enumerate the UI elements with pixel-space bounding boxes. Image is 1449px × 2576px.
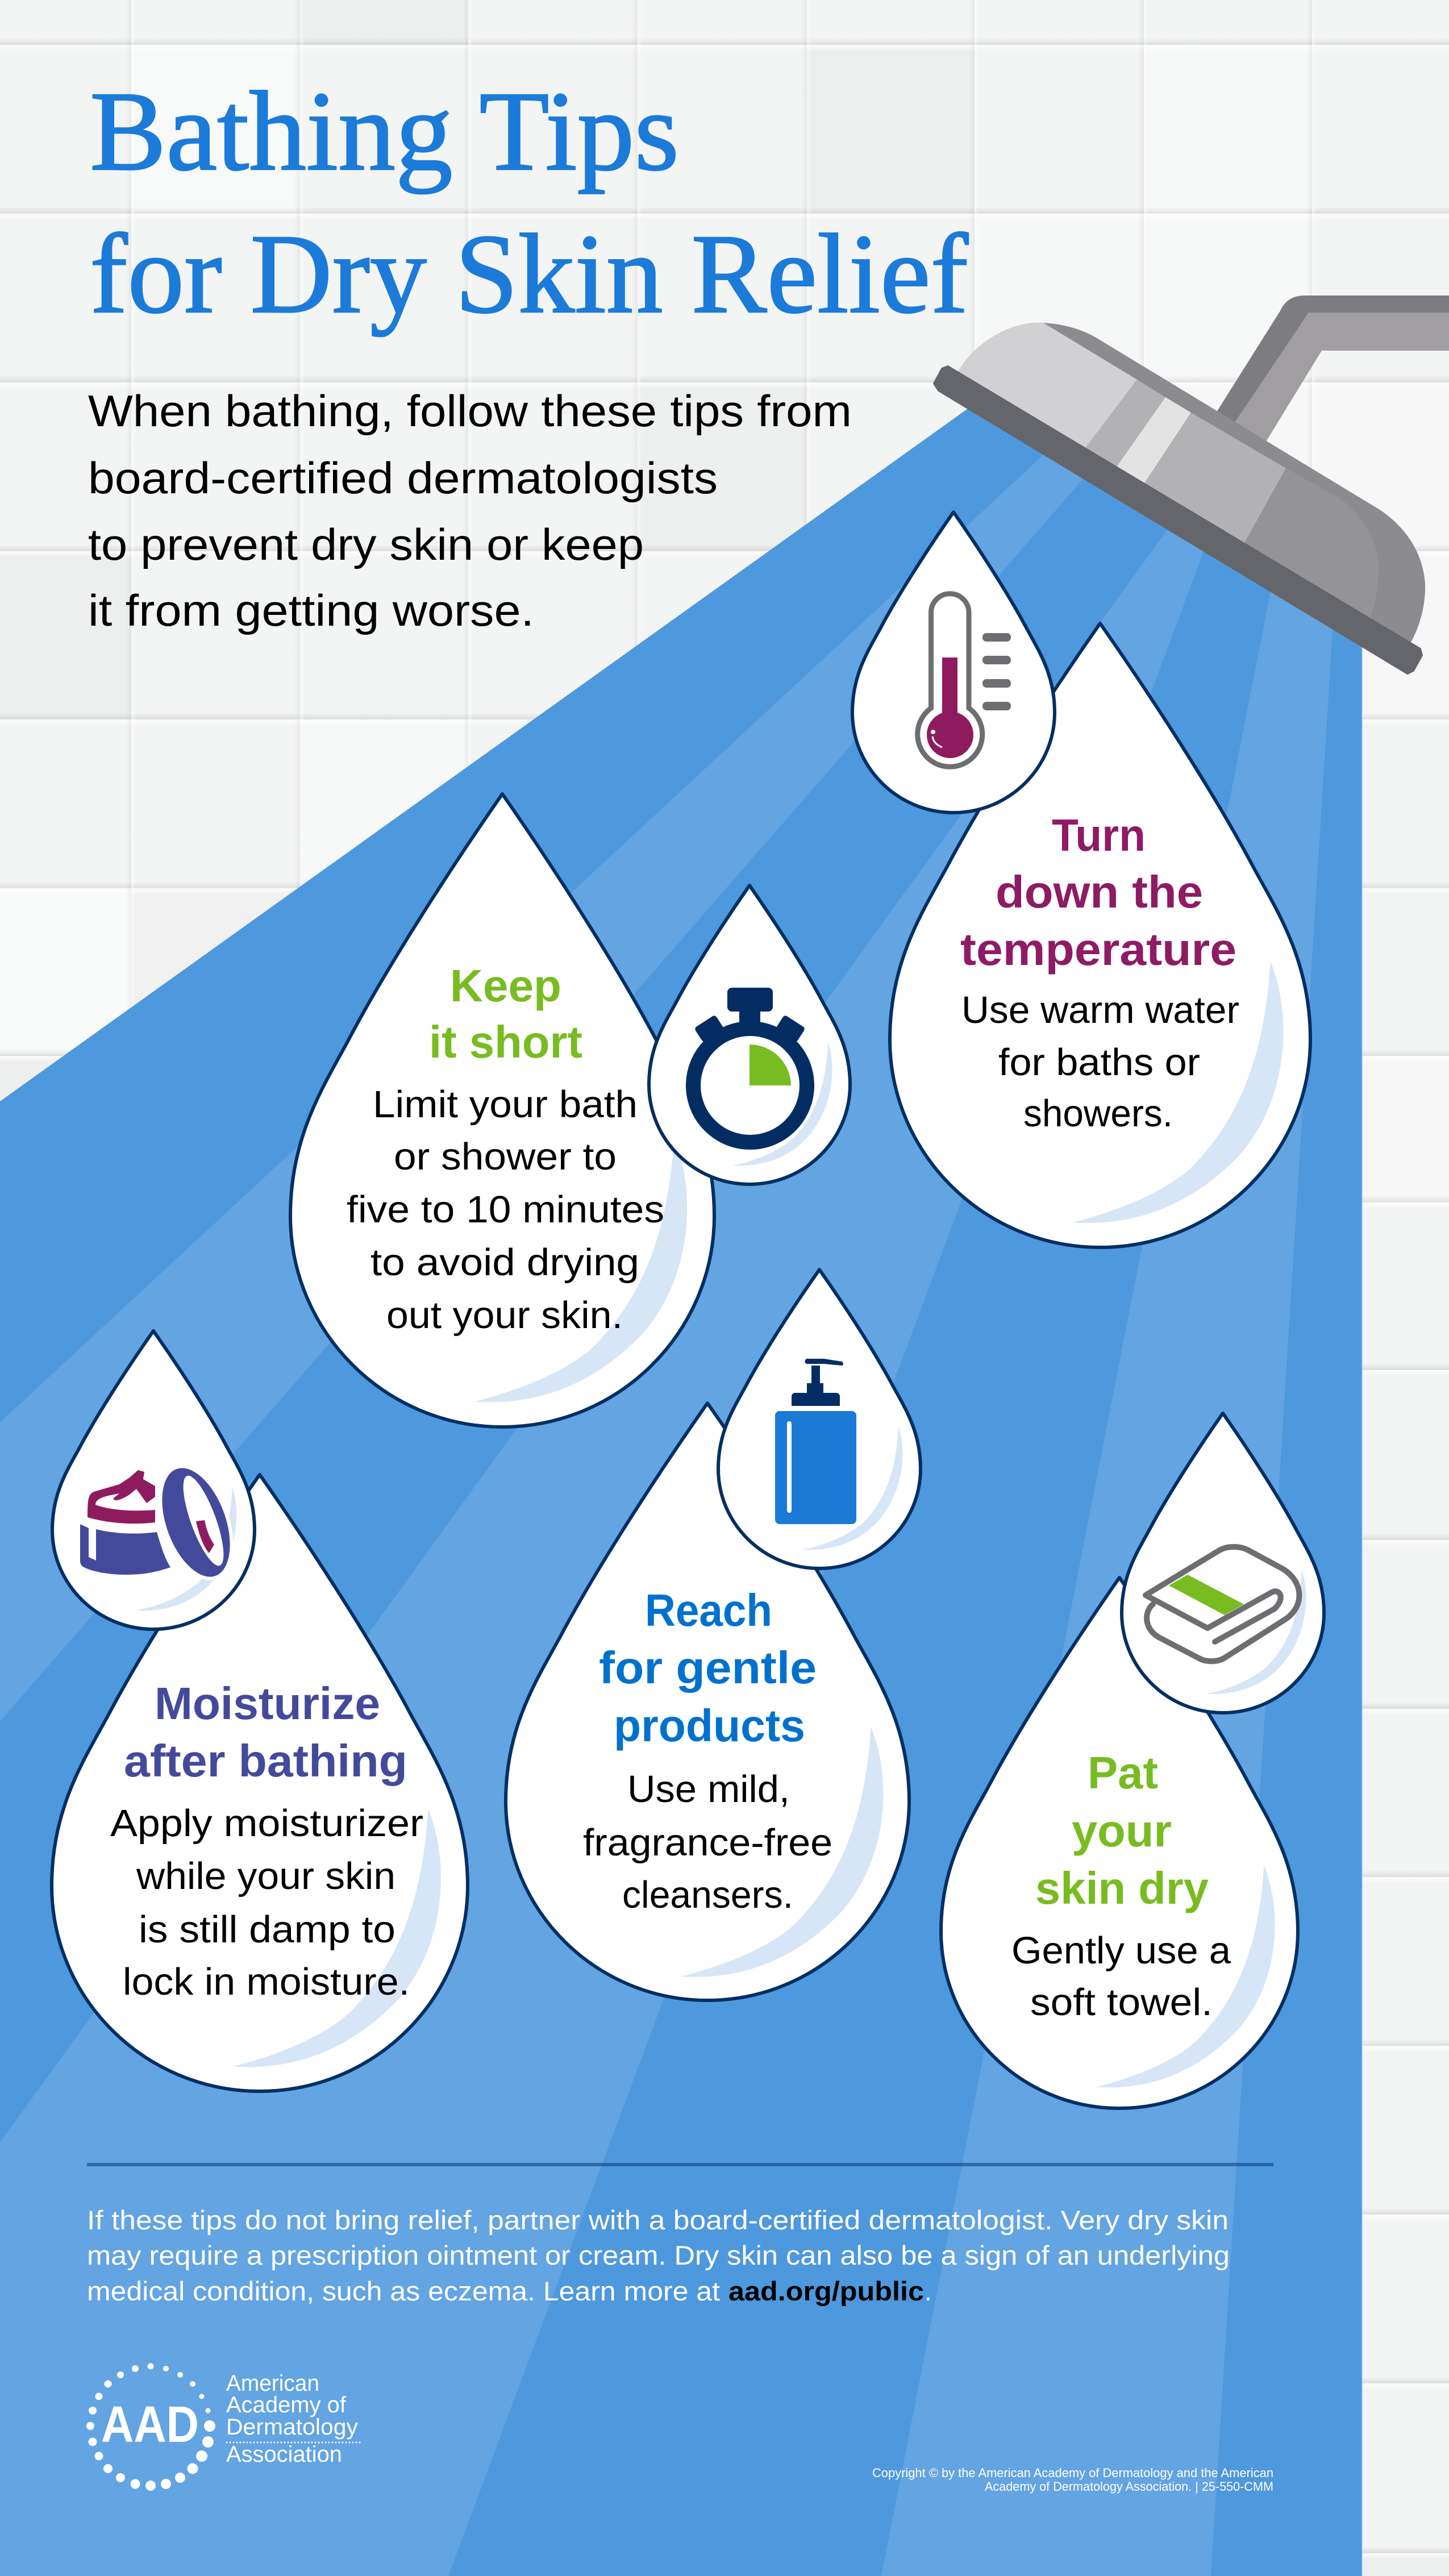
large drop bbox=[890, 623, 1310, 1247]
logo wordmark: Dermatology bbox=[226, 2415, 358, 2440]
footer text: . bbox=[925, 2276, 932, 2306]
footer text bbox=[87, 2205, 1230, 2306]
heading bbox=[1035, 1747, 1209, 1913]
body text: Limit your bath bbox=[373, 1083, 638, 1126]
body text bbox=[1011, 1929, 1231, 2024]
icon: moisturizer jar bbox=[80, 1455, 248, 1590]
title: for Dry Skin Relief bbox=[90, 211, 968, 337]
body text: for baths or bbox=[998, 1041, 1200, 1084]
heading: Turn bbox=[1052, 810, 1146, 860]
footer text: aad.org/public bbox=[728, 2276, 924, 2306]
logo wordmark: American bbox=[226, 2371, 319, 2396]
body text: while your skin bbox=[136, 1855, 395, 1897]
body text: Use warm water bbox=[961, 989, 1239, 1031]
heading: after bathing bbox=[124, 1736, 407, 1786]
body text: cleansers. bbox=[622, 1874, 793, 1916]
footer text: medical condition, such as eczema. Learn more at bbox=[87, 2276, 720, 2306]
panel: reach for gentle products bbox=[506, 1270, 921, 2000]
panel: keep it short bbox=[290, 794, 850, 1427]
highlight bbox=[1073, 962, 1283, 1223]
body text: lock in moisture. bbox=[123, 1961, 410, 2003]
intro text bbox=[88, 386, 852, 635]
logo dot ring bbox=[86, 2363, 215, 2491]
logo: American Academy of Dermatology Association bbox=[86, 2363, 361, 2491]
logo letters: AAD bbox=[101, 2396, 199, 2453]
copyright: Academy of Dermatology Association. | 25-550-CMM bbox=[985, 2479, 1273, 2494]
small drop bbox=[1122, 1413, 1324, 1713]
heading: it short bbox=[429, 1017, 582, 1067]
title bbox=[90, 69, 968, 337]
logo wordmark: Association bbox=[226, 2442, 342, 2467]
large drop bbox=[506, 1403, 909, 2000]
small drop bbox=[852, 512, 1055, 813]
title: Bathing Tips bbox=[90, 69, 679, 194]
heading: temperature bbox=[960, 924, 1236, 975]
highlight bbox=[1096, 1865, 1275, 2087]
body text bbox=[961, 989, 1239, 1135]
panel: moisturize after bathing bbox=[52, 1331, 468, 2091]
highlight bbox=[232, 1809, 441, 2067]
large drop bbox=[941, 1578, 1298, 2108]
highlight bbox=[1206, 1570, 1306, 1694]
icon: stopwatch bbox=[693, 988, 807, 1142]
logo wordmark bbox=[226, 2371, 361, 2467]
footer text: may require a prescription ointment or cream. Dry skin can also be a sign of an underlying bbox=[87, 2240, 1230, 2270]
highlight bbox=[681, 1726, 883, 1977]
body text: soft towel. bbox=[1030, 1981, 1213, 2024]
highlight bbox=[732, 1042, 832, 1166]
highlight bbox=[802, 1426, 902, 1550]
body text: or shower to bbox=[394, 1135, 617, 1178]
body text: to avoid drying bbox=[370, 1241, 639, 1284]
small drop bbox=[718, 1270, 921, 1568]
heading bbox=[429, 960, 582, 1067]
heading: Reach bbox=[645, 1585, 772, 1636]
heading: Moisturize bbox=[155, 1678, 380, 1729]
body text bbox=[583, 1768, 832, 1916]
large drop bbox=[290, 794, 714, 1427]
heading bbox=[960, 810, 1236, 975]
icon: shower head bbox=[934, 296, 1449, 673]
body text: five to 10 minutes bbox=[347, 1188, 664, 1231]
body text: Gently use a bbox=[1011, 1929, 1231, 1972]
heading: products bbox=[614, 1700, 805, 1751]
body text: Use mild, bbox=[627, 1768, 790, 1811]
large drop bbox=[52, 1475, 468, 2091]
highlight bbox=[136, 1487, 236, 1610]
body text: fragrance-free bbox=[583, 1821, 832, 1864]
highlight bbox=[475, 1137, 687, 1402]
body text bbox=[110, 1802, 423, 2003]
heading: down the bbox=[996, 867, 1203, 917]
body text bbox=[347, 1083, 664, 1337]
heading: Keep bbox=[450, 960, 561, 1011]
heading bbox=[599, 1585, 817, 1751]
copyright bbox=[872, 2466, 1273, 2494]
panel: turn down the temperature bbox=[852, 512, 1310, 1247]
logo wordmark: Academy of bbox=[226, 2392, 347, 2417]
body text: is still damp to bbox=[139, 1908, 395, 1951]
small drop bbox=[52, 1331, 255, 1629]
small drop bbox=[649, 885, 850, 1184]
body text: showers. bbox=[1023, 1092, 1173, 1135]
heading: skin dry bbox=[1035, 1863, 1209, 1913]
footer text: If these tips do not bring relief, partner with a board-certified dermatologist. Very dry skin bbox=[87, 2205, 1229, 2235]
shower water stream bbox=[0, 402, 1363, 2576]
intro text: it from getting worse. bbox=[88, 585, 534, 635]
divider bbox=[87, 2163, 1273, 2166]
intro text: board-certified dermatologists bbox=[88, 453, 718, 503]
heading: your bbox=[1072, 1805, 1172, 1856]
intro text: to prevent dry skin or keep bbox=[88, 519, 644, 569]
panel: pat your skin dry bbox=[941, 1413, 1324, 2108]
heading bbox=[124, 1678, 407, 1786]
heading: Pat bbox=[1088, 1747, 1158, 1798]
heading: for gentle bbox=[599, 1642, 817, 1693]
copyright: Copyright © by the American Academy of Dermatology and the American bbox=[872, 2466, 1273, 2480]
intro text: When bathing, follow these tips from bbox=[88, 386, 852, 436]
icon: folded towel bbox=[1146, 1547, 1299, 1661]
icon: pump bottle bbox=[775, 1359, 856, 1524]
body text: out your skin. bbox=[386, 1294, 623, 1337]
body text: Apply moisturizer bbox=[110, 1802, 423, 1845]
icon: thermometer bbox=[918, 594, 1011, 767]
